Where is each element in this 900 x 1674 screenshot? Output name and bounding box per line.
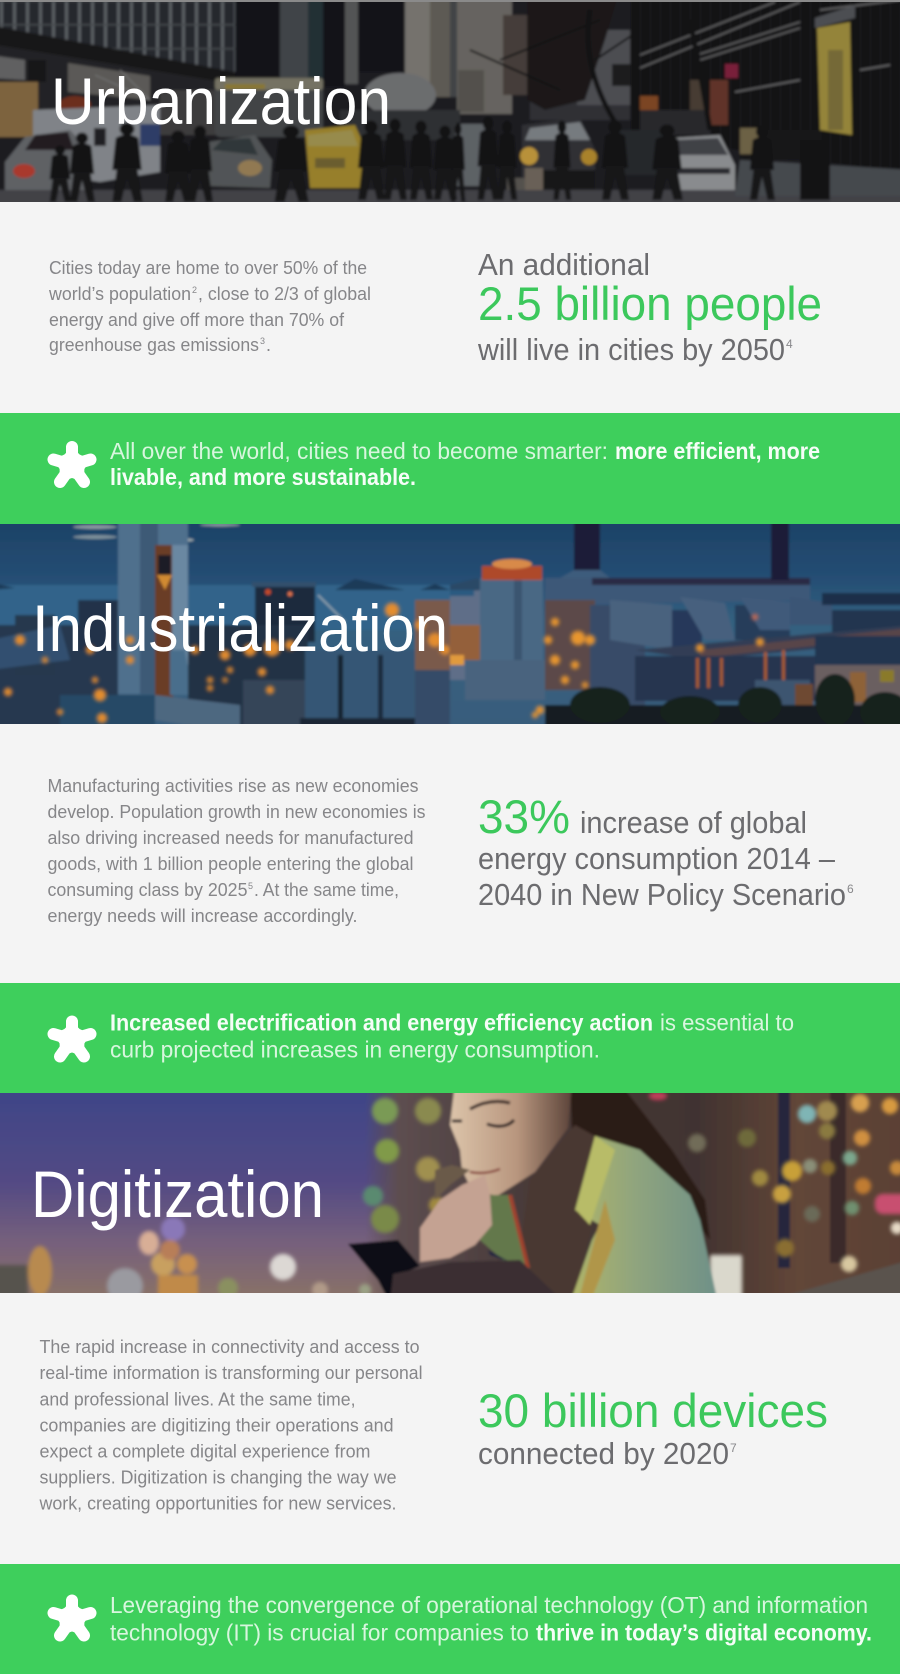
stat: 33% increase: increase of global bbox=[580, 805, 807, 840]
text block: manufacturing: 5 bbox=[248, 881, 253, 891]
text block: cities: energy and give off more than 70% of bbox=[49, 310, 345, 330]
callout band: electrification bbox=[0, 983, 900, 1093]
callout text: curb projected increases in energy consumption. bbox=[110, 1036, 600, 1062]
photo: city street crossing bbox=[0, 0, 900, 222]
text block: cities: Cities today are home to over 50% of the bbox=[49, 258, 367, 278]
icon: asterisk star bbox=[54, 1600, 90, 1636]
photo: industrial plant at dusk bbox=[0, 524, 900, 724]
text block: cities: world’s population bbox=[48, 284, 191, 304]
heading: Industrialization: Industrialization bbox=[32, 591, 448, 665]
stat: 33% increase: 33% bbox=[478, 790, 570, 843]
callout text: Increased electrification and energy efficiency action bbox=[110, 1010, 653, 1036]
text block: manufacturing: also driving increased needs for manufactured bbox=[48, 828, 414, 848]
stat: 30 billion devices: 30 billion devices bbox=[478, 1384, 828, 1437]
callout text: All over the world, cities need to become smarter: bbox=[110, 438, 608, 464]
stat: 2.5 billion people bbox=[477, 247, 822, 367]
callout text: is essential to bbox=[660, 1010, 794, 1036]
text block: connectivity: companies are digitizing their operations and bbox=[40, 1416, 394, 1436]
stat: 30 billion devices: connected by 2020 bbox=[478, 1436, 729, 1471]
text block: connectivity: and professional lives. At the same time, bbox=[40, 1390, 356, 1410]
text block: cities: 2 bbox=[192, 285, 197, 295]
heading: Digitization: Digitization bbox=[31, 1157, 324, 1231]
panel: digitization section bbox=[0, 1080, 900, 1674]
text block: cities: . bbox=[266, 335, 271, 355]
callout band: smarter cities bbox=[0, 413, 900, 524]
text block: connectivity: work, creating opportunities for new services. bbox=[39, 1494, 396, 1514]
text block: connectivity: suppliers. Digitization is changing the way we bbox=[40, 1468, 396, 1488]
text block: cities: , close to 2/3 of global bbox=[198, 284, 371, 304]
heading: Urbanization: Urbanization bbox=[51, 64, 391, 138]
stat: 33% increase: 6 bbox=[847, 882, 854, 896]
text block: manufacturing: develop. Population growth in new economies is bbox=[48, 802, 426, 822]
stat: 33% increase: energy consumption 2014 – bbox=[478, 841, 836, 876]
photo: woman looking at smartphone bbox=[0, 1093, 900, 1293]
stat: 30 billion devices: 7 bbox=[730, 1441, 737, 1455]
callout band: convergence bbox=[0, 1564, 900, 1674]
stat: 2.5 billion people: 4 bbox=[786, 337, 793, 351]
icon: asterisk star bbox=[54, 1022, 90, 1056]
text block: connectivity bbox=[39, 1337, 422, 1514]
text block: manufacturing: consuming class by 2025 bbox=[48, 880, 248, 900]
stat: 33% increase bbox=[478, 790, 854, 912]
callout text bbox=[110, 1592, 872, 1646]
text block: manufacturing: goods, with 1 billion people entering the global bbox=[48, 854, 414, 874]
callout text: technology (IT) is crucial for companies to bbox=[110, 1620, 529, 1646]
text block: connectivity: expect a complete digital experience from bbox=[40, 1442, 370, 1462]
text block: manufacturing: energy needs will increase accordingly. bbox=[48, 906, 358, 926]
stat: 30 billion devices bbox=[478, 1384, 828, 1471]
stat: 33% increase: 2040 in New Policy Scenario bbox=[478, 877, 846, 912]
panel: urbanization section bbox=[0, 0, 900, 524]
text block: connectivity: The rapid increase in connectivity and access to bbox=[40, 1337, 420, 1357]
stat: 2.5 billion people: An additional bbox=[478, 247, 650, 282]
text block: manufacturing bbox=[48, 776, 426, 926]
text block: cities: greenhouse gas emissions bbox=[49, 335, 259, 355]
text block: cities bbox=[48, 258, 371, 355]
callout text bbox=[110, 438, 820, 490]
callout text: more efficient, more bbox=[615, 438, 820, 464]
text block: manufacturing: Manufacturing activities rise as new economies bbox=[48, 776, 418, 796]
text block: cities: 3 bbox=[260, 336, 265, 346]
stat: 2.5 billion people: 2.5 billion people bbox=[478, 277, 822, 330]
panel: industrialization section bbox=[0, 510, 900, 1093]
callout text: Leveraging the convergence of operational technology (OT) and information bbox=[110, 1592, 868, 1618]
callout text bbox=[110, 1010, 794, 1062]
text block: manufacturing: . At the same time, bbox=[254, 880, 399, 900]
callout text: thrive in today’s digital economy. bbox=[536, 1620, 872, 1646]
stat: 2.5 billion people: will live in cities by 2050 bbox=[477, 332, 785, 367]
icon: asterisk star bbox=[54, 447, 90, 482]
callout text: livable, and more sustainable. bbox=[110, 464, 416, 490]
text block: connectivity: real-time information is transforming our personal bbox=[40, 1363, 422, 1383]
